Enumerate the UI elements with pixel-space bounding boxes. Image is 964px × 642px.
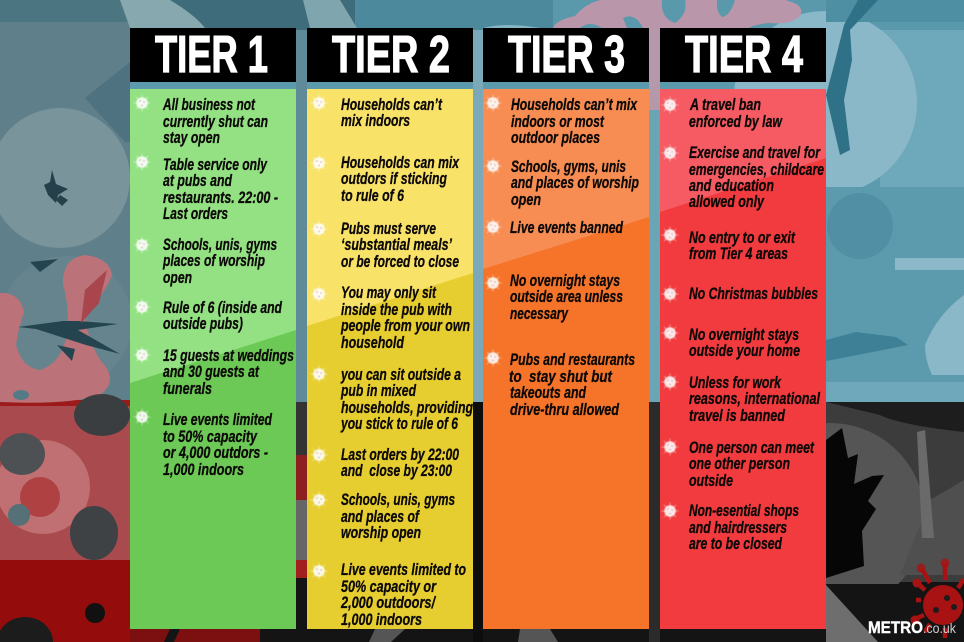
bullet: schools: worship open [341, 523, 421, 542]
bullet: all business: All business not [162, 95, 256, 114]
logo: Metro.co.uk: .co.uk [923, 620, 957, 636]
logo: Metro.co.uk [868, 618, 957, 637]
bullet: shops: Non-esential shops [689, 501, 799, 520]
bullet: live events: Live events limited to [341, 560, 466, 579]
bullet: schools: and places of [341, 507, 421, 526]
bullet: one person: One person can meet [689, 438, 815, 457]
panel: Tier 3 [483, 26, 649, 629]
bullet: table service: Table service only [163, 155, 268, 174]
bullet: substantial meals: Pubs must serve [341, 219, 436, 238]
bullet: overnight stays: outside area unless [510, 287, 623, 306]
bullet: sit inside: people from your own [340, 316, 470, 335]
bullet: schools [134, 235, 277, 287]
bullet: schools: open [163, 268, 192, 287]
bullet: schools: and places of worship [511, 173, 639, 192]
heading: Tier 1: TIER 1 [155, 26, 268, 84]
panel background: Tier 4 [660, 89, 826, 629]
bullet: sit outside: you stick to rule of 6 [340, 414, 458, 433]
bullet: exercise [662, 143, 824, 211]
panel: Tier 4 [660, 26, 826, 629]
bullet: exercise: and education [689, 176, 774, 195]
bullet: overnight stays: necessary [510, 304, 569, 323]
bullet: schools: Schools, unis, gyms [163, 235, 277, 254]
bullet: households outdoors [310, 153, 460, 205]
bullet: households indoors [310, 94, 443, 130]
panel: Tier 2 [307, 26, 473, 629]
bullet: weddings: 15 guests at weddings [163, 346, 294, 365]
bullet: schools: Schools, unis, gyms [341, 490, 455, 509]
bullet: overnight stays: No overnight stays [510, 271, 620, 290]
bullet: exercise: allowed only [689, 192, 765, 211]
bullet: weddings [134, 346, 294, 398]
bullet: weddings: and 30 guests at [163, 362, 260, 381]
bullet: live events: Live events limited [163, 410, 272, 429]
bullet: schools [310, 490, 455, 542]
bullet: overnight stays: No overnight stays [689, 325, 799, 344]
heading: Tier 4: TIER 4 [685, 26, 803, 84]
bullet: households: indoors or most [511, 112, 605, 131]
bullet: schools: open [511, 190, 541, 209]
bullet: pubs and restaurants: to stay shut but [509, 367, 613, 386]
bullet: households outdoors: outdors if sticking [341, 169, 447, 188]
bullet: sit inside: You may only sit [341, 283, 437, 302]
bullet: Christmas bubbles: No Christmas bubbles [689, 284, 818, 303]
panel: Tier 1 [130, 26, 296, 629]
bullet: households: Households can’t mix [511, 95, 638, 114]
bullet: households outdoors: to rule of 6 [341, 186, 404, 205]
bullet: exercise: emergencies, childcare [689, 160, 824, 179]
bullet: international travel: reasons, international [689, 389, 821, 408]
bullet: shops [662, 501, 799, 553]
bullet: sit inside: inside the pub with [341, 300, 452, 319]
bullet: live events: 1,000 indoors [341, 610, 422, 629]
background: dark bottom scene [130, 402, 964, 642]
bullet: sit outside: households, providing [341, 398, 473, 417]
bullet: weddings: funerals [163, 379, 212, 398]
bullet: sit outside: pub in mixed [340, 381, 416, 400]
panel background: Tier 1 [130, 89, 296, 629]
logo: Metro.co.uk: METRO [868, 618, 923, 637]
bullet: shops: are to be closed [689, 534, 782, 553]
bullet: rule of 6: outside pubs) [163, 314, 243, 333]
bullet: live events [310, 560, 466, 629]
bullet: live events: 50% capacity or [341, 577, 437, 596]
bullet: exercise: Exercise and travel for [689, 143, 821, 162]
bullet: households: outdoor places [511, 128, 600, 147]
bullet: Christmas bubbles [662, 284, 818, 303]
bullet: sit outside: you can sit outside a [340, 365, 461, 384]
heading: Tier 2: TIER 2 [332, 26, 450, 84]
panel background: Tier 2 [307, 89, 473, 629]
bullet: international travel [662, 373, 821, 425]
bullet: last orders: Last orders by 22:00 [341, 445, 459, 464]
bullet: last orders: and close by 23:00 [341, 461, 452, 480]
bullet: table service [134, 154, 278, 223]
bullet: live events [484, 218, 623, 237]
bullet: pubs and restaurants: drive-thru allowed [510, 400, 619, 419]
bullet: one person: outside [689, 471, 733, 490]
bullet: all business: stay open [163, 128, 220, 147]
bullet: households indoors: mix indoors [341, 111, 410, 130]
background: red left scene [0, 255, 132, 642]
bullet: table service: at pubs and [163, 171, 232, 190]
bullet: households [484, 94, 638, 147]
bullet: live events: to 50% capacity [163, 427, 258, 446]
bullet: international travel: travel is banned [689, 406, 785, 425]
bullet: all business [134, 94, 268, 147]
bullet: pubs and restaurants: Pubs and restaurants [510, 350, 635, 369]
bullet: travel ban: A travel ban [689, 95, 761, 114]
icon: red virus [910, 558, 964, 638]
bullet: households indoors: Households can’t [341, 95, 443, 114]
bullet: no entry: from Tier 4 areas [689, 244, 788, 263]
bullet: table service: restaurants. 22:00 - [163, 188, 278, 207]
bullet: live events: or 4,000 outdors - [163, 443, 268, 462]
bullet: table service: Last orders [163, 204, 228, 223]
bullet: live events: 2,000 outdoors/ [340, 593, 437, 612]
bullet: travel ban: enforced by law [689, 112, 783, 131]
bullet: overnight stays [662, 324, 800, 360]
bullet: shops: and hairdressers [689, 518, 787, 537]
bullet: travel ban [662, 95, 783, 131]
heading: Tier 3: TIER 3 [508, 26, 625, 84]
bullet: substantial meals: ‘substantial meals’ [341, 235, 452, 254]
bullet: live events: 1,000 indoors [163, 460, 244, 479]
bullet: one person: one other person [689, 454, 790, 473]
bullet: live events: Live events banned [510, 218, 623, 237]
bullet: pubs and restaurants [484, 350, 635, 419]
bullet: rule of 6 [134, 298, 282, 333]
bullet: substantial meals: or be forced to close [341, 252, 459, 271]
bullet: schools [484, 157, 639, 209]
bullet: no entry: No entry to or exit [689, 228, 796, 247]
bullet: overnight stays: outside your home [689, 341, 800, 360]
bullet: schools: places of worship [162, 251, 265, 270]
bullet: households outdoors: Households can mix [341, 153, 460, 172]
bullet: live events [134, 408, 272, 479]
bullet: international travel: Unless for work [689, 373, 782, 392]
bullet: no entry [662, 226, 796, 263]
bullet: substantial meals [310, 219, 459, 271]
bullet: sit outside [310, 365, 473, 433]
background: teal table scene [0, 0, 964, 404]
bullet: sit inside: household [341, 333, 404, 352]
background: pink virus blob at top [483, 0, 801, 110]
bullet: overnight stays [484, 271, 623, 323]
bullet: pubs and restaurants: takeouts and [510, 383, 586, 402]
panel background: Tier 3 [483, 89, 649, 629]
bullet: all business: currently shut can [163, 112, 268, 131]
bullet: schools: Schools, gyms, unis [511, 157, 626, 176]
bullet: last orders [310, 445, 459, 480]
bullet: rule of 6: Rule of 6 (inside and [163, 298, 282, 317]
bullet: sit inside [310, 283, 470, 352]
bullet: one person [662, 438, 815, 490]
